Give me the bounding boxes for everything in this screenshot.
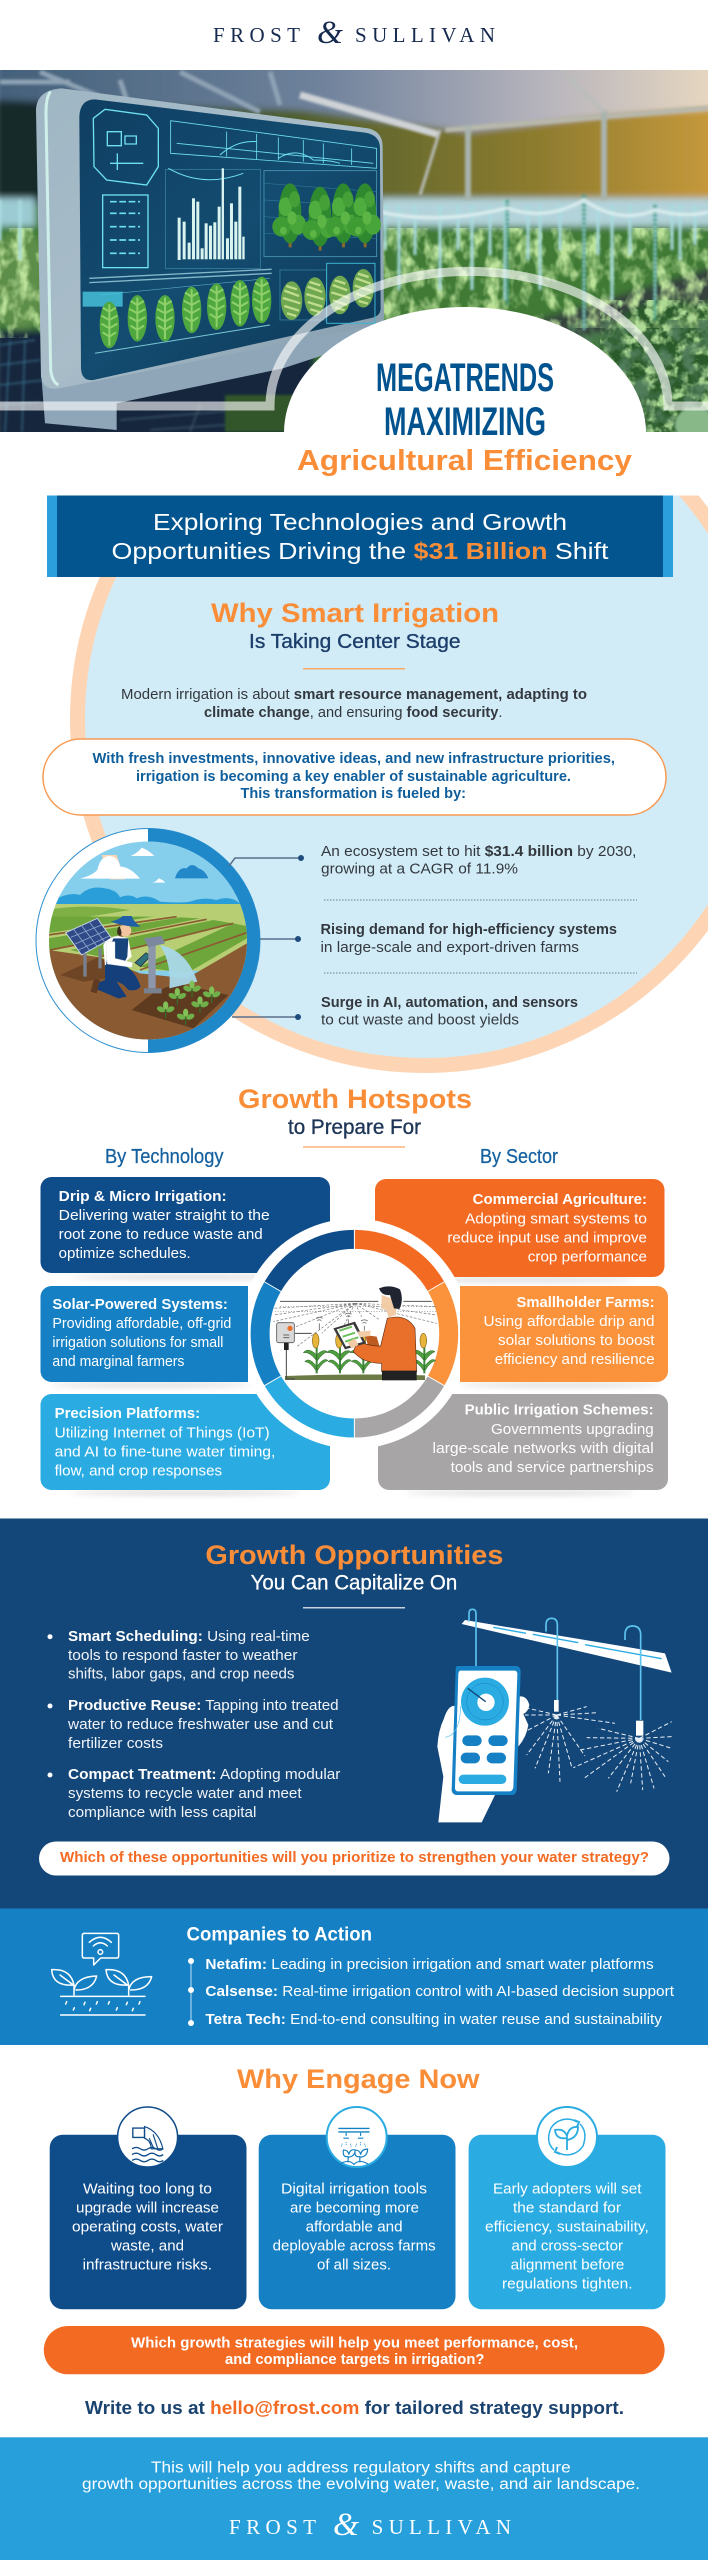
hotspot text: by sector: Adopting smart systems to	[465, 1211, 647, 1227]
title block	[297, 356, 632, 477]
card: digital irrigation tools: deployable across farms	[273, 2239, 436, 2255]
card: early adopters	[469, 2107, 666, 2309]
card: waiting too long: Waiting too long to	[83, 2181, 212, 2197]
panel: smallholder farms shape	[460, 1286, 668, 1382]
callout pill: This transformation is fueled by:	[240, 786, 466, 802]
hotspot text: by technology: Precision Platforms:	[55, 1406, 200, 1422]
opportunities list: compliance with less capital	[68, 1805, 256, 1821]
opportunities list	[48, 1629, 341, 1821]
panel: drip and micro irrigation shape	[40, 1177, 330, 1273]
footer logo: SULLIVAN	[372, 2515, 511, 2539]
hotspot text: by technology: and AI to fine-tune water timing,	[55, 1445, 275, 1461]
timeline of companies: Calsense: Real-time irrigation control with AI-based decision support	[205, 1984, 674, 2000]
footer	[0, 2437, 708, 2560]
hotspot text: by sector: Public Irrigation Schemes:	[465, 1403, 654, 1419]
title block: MEGATRENDS	[376, 356, 554, 400]
callout pill	[43, 739, 666, 815]
card: early adopters: efficiency, sustainability,	[485, 2219, 649, 2235]
panel: solar powered shape	[40, 1286, 248, 1382]
opportunities list: fertilizer costs	[68, 1736, 163, 1752]
panel: why smart irrigation circle background	[70, 496, 708, 1073]
top logo: SULLIVAN	[355, 23, 495, 47]
white ring mask	[239, 1219, 469, 1449]
heading: growth hotspots: to Prepare For	[288, 1116, 421, 1139]
hotspot text: by sector: reduce input use and improve	[447, 1230, 647, 1246]
icon: connected seedlings	[52, 1933, 152, 2015]
center illustration: farmer with tablet in corn field	[273, 1286, 437, 1380]
icon: seedling in circular arrows	[549, 2119, 585, 2155]
panel: public irrigation shape	[378, 1394, 668, 1490]
card: waiting too long: operating costs, water	[72, 2219, 223, 2235]
heading: growth opportunities	[205, 1540, 503, 1608]
hotspot text: by sector	[432, 1192, 655, 1476]
intro paragraph: climate change, and ensuring food security.	[204, 705, 502, 721]
opportunities list: water to reduce freshwater use and cut	[67, 1717, 333, 1733]
panel: companies to action	[0, 1908, 708, 2045]
hotspot text: by sector: tools and service partnerships	[451, 1460, 654, 1476]
subtitle banner: Opportunities Driving the $31 Billion Shift	[112, 538, 609, 564]
market drivers list: An ecosystem set to hit $31.4 billion by 2030,	[321, 844, 636, 860]
top logo	[213, 15, 495, 51]
white arch	[284, 307, 646, 433]
icon: sprinkler over seedlings	[338, 2128, 370, 2164]
card: digital irrigation tools: of all sizes.	[317, 2258, 391, 2274]
market drivers list: Rising demand for high-efficiency systems	[320, 922, 617, 938]
opportunities list: Productive Reuse: Tapping into treated	[68, 1698, 339, 1714]
card: early adopters: regulations tighten.	[502, 2277, 632, 2293]
hotspot text: by sector: Governments upgrading	[491, 1422, 654, 1438]
hotspot text: by technology	[52, 1189, 275, 1480]
footer: This will help you address regulatory shifts and capture	[151, 2459, 571, 2476]
footer logo: &	[333, 2507, 359, 2543]
hotspot text: by technology: Solar-Powered Systems:	[52, 1297, 228, 1313]
question pill	[39, 1842, 670, 1876]
panel: hotspot shadows	[50, 1275, 660, 1495]
timeline of companies: Tetra Tech: End-to-end consulting in water reuse and sustainability	[205, 2012, 663, 2028]
hotspot text: by technology: Delivering water straight to the	[59, 1208, 270, 1224]
card: digital irrigation tools: affordable and	[306, 2219, 403, 2235]
heading: growth opportunities: Growth Opportunities	[205, 1540, 503, 1570]
callout pill: irrigation is becoming a key enabler of sustainable agriculture.	[136, 769, 571, 785]
crop texture	[0, 228, 708, 432]
column label: by technology: By Technology	[105, 1146, 224, 1168]
footer logo	[229, 2507, 511, 2543]
opportunities list: tools to respond faster to weather	[68, 1648, 298, 1664]
panel: growth opportunities	[0, 1518, 708, 1908]
orange question pill: and compliance targets in irrigation?	[225, 2352, 485, 2368]
card: waiting too long	[50, 2107, 247, 2309]
hero image: smart irrigation dashboard in a field	[0, 60, 708, 443]
card: digital irrigation tools: are becoming more	[290, 2200, 419, 2216]
hotspot text: by sector: efficiency and resilience	[495, 1352, 655, 1368]
dashboard panel	[36, 88, 384, 430]
heading: growth hotspots	[238, 1084, 472, 1148]
heading: growth hotspots: Growth Hotspots	[238, 1084, 472, 1114]
card: early adopters: and cross-sector	[512, 2239, 623, 2255]
footer: growth opportunities across the evolving water, waste, and air landscape.	[82, 2476, 640, 2493]
heading: why smart irrigation	[211, 598, 499, 670]
market drivers list	[320, 844, 637, 1028]
hotspot text: by sector: crop performance	[528, 1249, 647, 1265]
market drivers list: in large-scale and export-driven farms	[320, 940, 579, 956]
heading: growth opportunities: You Can Capitalize On	[251, 1572, 457, 1594]
title block: Agricultural Efficiency	[297, 445, 632, 477]
card: digital irrigation tools	[259, 2107, 456, 2309]
circular illustration: farmer with solar irrigation	[36, 828, 260, 1052]
card: waiting too long: waste, and	[110, 2239, 184, 2255]
translucent arch band	[0, 271, 708, 406]
opportunities list: Compact Treatment: Adopting modular	[68, 1767, 341, 1783]
hotspot text: by technology: irrigation solutions for small	[52, 1335, 223, 1351]
connector lines	[229, 855, 304, 1020]
market drivers list: growing at a CAGR of 11.9%	[321, 862, 518, 878]
orange question pill: Which growth strategies will help you meet performance, cost,	[131, 2335, 578, 2351]
callout pill: With fresh investments, innovative ideas, and new infrastructure priorities,	[92, 751, 615, 767]
hotspot text: by sector: Using affordable drip and	[484, 1314, 654, 1330]
heading: why smart irrigation: Why Smart Irrigation	[211, 598, 499, 628]
footer logo: FROST	[229, 2515, 316, 2539]
title block: MAXIMIZING	[384, 400, 546, 444]
donut ring of six segments	[260, 1228, 449, 1440]
panel: commercial agriculture shape	[375, 1179, 664, 1277]
panel: precision platforms shape	[40, 1394, 330, 1490]
card: early adopters: the standard for	[513, 2200, 621, 2216]
card: digital irrigation tools: Digital irrigation tools	[281, 2181, 427, 2197]
contact line: Write to us at hello@frost.com for tailored strategy support.	[85, 2398, 624, 2418]
column label: by sector: By Sector	[480, 1146, 558, 1168]
timeline of companies: Netafim: Leading in precision irrigation and smart water platforms	[205, 1957, 654, 1973]
card: early adopters: alignment before	[511, 2258, 624, 2274]
hotspot text: by technology: flow, and crop responses	[55, 1464, 222, 1480]
card: waiting too long: upgrade will increase	[76, 2200, 219, 2216]
question pill: Which of these opportunities will you prioritize to strengthen your water strategy?	[60, 1850, 649, 1866]
card: waiting too long: infrastructure risks.	[83, 2258, 212, 2274]
hotspot text: by sector: Commercial Agriculture:	[473, 1192, 647, 1208]
opportunities list: shifts, labor gaps, and crop needs	[68, 1667, 294, 1683]
opportunities list: Smart Scheduling: Using real-time	[68, 1629, 310, 1645]
hotspot text: by technology: Utilizing Internet of Things (IoT)	[55, 1426, 270, 1442]
market drivers list: to cut waste and boost yields	[321, 1012, 519, 1028]
top logo: &	[317, 15, 343, 51]
heading: why engage now: Why Engage Now	[237, 2064, 481, 2094]
timeline of companies	[188, 1957, 674, 2028]
top logo: FROST	[213, 23, 300, 47]
panel: companies to action: Companies to Action	[186, 1924, 372, 1946]
intro paragraph	[121, 687, 587, 721]
hotspot text: by technology: Providing affordable, off-grid	[52, 1316, 231, 1332]
card: early adopters: Early adopters will set	[493, 2181, 642, 2197]
intro paragraph: Modern irrigation is about smart resource management, adapting to	[121, 687, 587, 703]
orange question pill	[44, 2326, 665, 2374]
hotspot text: by technology: root zone to reduce waste and	[59, 1227, 263, 1243]
hotspot text: by sector: solar solutions to boost	[498, 1333, 654, 1349]
hotspot text: by technology: and marginal farmers	[52, 1354, 184, 1370]
icon: pipe discharging into water	[132, 2127, 163, 2162]
opportunities list: systems to recycle water and meet	[68, 1786, 302, 1802]
market drivers list: Surge in AI, automation, and sensors	[321, 995, 578, 1011]
hotspot text: by technology: optimize schedules.	[59, 1246, 191, 1262]
subtitle banner: Exploring Technologies and Growth	[153, 509, 567, 535]
subtitle banner	[47, 496, 673, 577]
hotspot text: by technology: Drip & Micro Irrigation:	[59, 1189, 227, 1205]
heading: why smart irrigation: Is Taking Center Stage	[249, 631, 460, 653]
icon: phone controlling sprinklers	[437, 1609, 672, 1822]
hotspot text: by sector: large-scale networks with digital	[432, 1441, 654, 1457]
hotspot text: by sector: Smallholder Farms:	[516, 1295, 654, 1311]
